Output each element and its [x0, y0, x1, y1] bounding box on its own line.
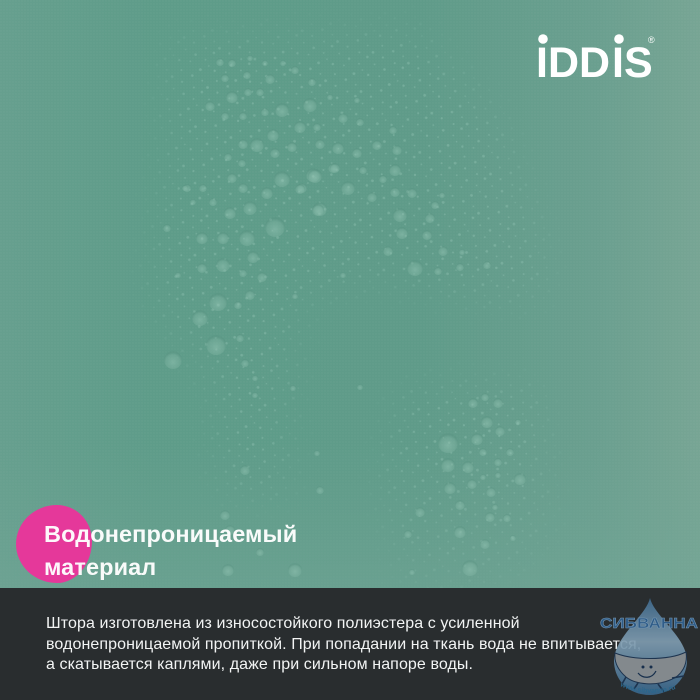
- pink circle accent: [16, 505, 92, 583]
- bottom dark panel: [0, 588, 700, 700]
- watermark: Sibvanna logo: [600, 598, 698, 695]
- body text: [46, 615, 641, 673]
- watermark: Sibvanna logo: www.sibvanna.ru: [620, 682, 676, 693]
- body text: а скатывается каплями, даже при сильном напоре воды.: [46, 656, 473, 673]
- watermark: Sibvanna logo: СИБВАННА: [600, 615, 698, 632]
- heading: waterproof material: Водонепроницаемый: [44, 521, 297, 547]
- heading: waterproof material: материал: [44, 554, 156, 580]
- heading: waterproof material: [44, 521, 297, 580]
- body text: Штора изготовлена из износостойкого полиэстера с усиленной: [46, 615, 520, 632]
- logo: IDDIS: ®: [648, 35, 655, 45]
- body text: водонепроницаемой пропиткой. При попадании на ткань вода не впитывается,: [46, 636, 641, 652]
